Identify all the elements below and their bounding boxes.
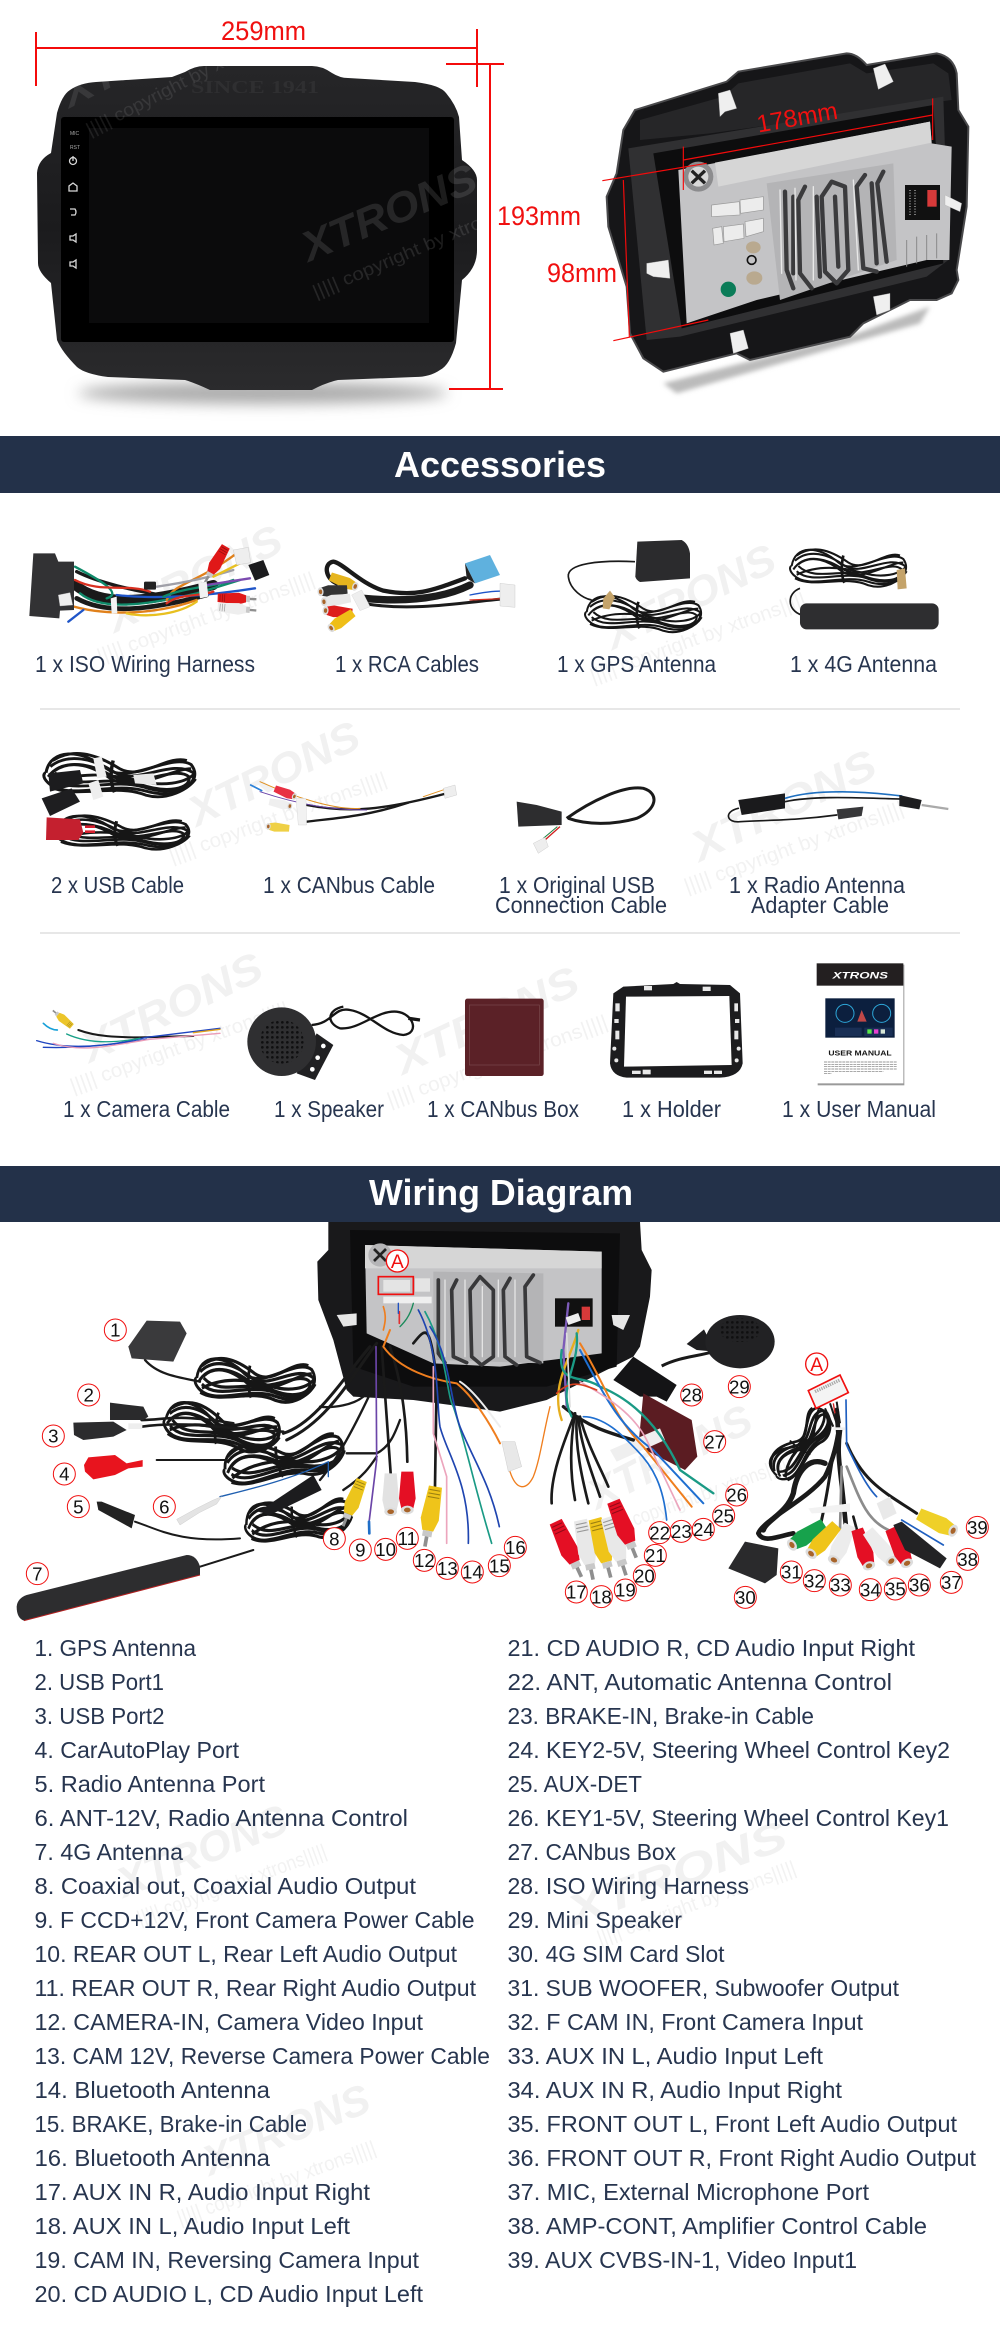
heading: Accessories: Accessories xyxy=(394,444,606,485)
accessories watermarks: XTRONS xyxy=(178,712,367,836)
accessories row 3 captions: 1 x Holder xyxy=(622,1096,721,1122)
callouts 16 to 39: 30 xyxy=(735,1587,756,1608)
wiring diagram xyxy=(17,1222,988,1621)
accessories watermarks xyxy=(67,516,907,1112)
connector A cable assembly xyxy=(758,1400,943,1545)
port list left column: 2. USB Port1 xyxy=(34,1669,164,1695)
port list left column: 10. REAR OUT L, Rear Left Audio Output xyxy=(34,1941,458,1967)
camera cable xyxy=(37,1007,220,1048)
accessories watermarks: XTRONS xyxy=(71,943,270,1072)
embossed brand text: SINCE 1941 xyxy=(191,77,319,97)
user manual: USER MANUAL xyxy=(828,1048,892,1057)
port list left column: 20. CD AUDIO L, CD Audio Input Left xyxy=(34,2281,424,2307)
callouts 16 to 39: 20 xyxy=(634,1565,655,1586)
callouts 16 to 39: 24 xyxy=(693,1519,714,1540)
callouts 1 to 15: 8 xyxy=(329,1528,340,1549)
head unit rear xyxy=(317,1222,652,1412)
port list left column: 6. ANT-12V, Radio Antenna Control xyxy=(34,1805,408,1831)
rear shadow xyxy=(663,307,930,393)
upper plastic recess xyxy=(640,63,952,140)
port list left column: 13. CAM 12V, Reverse Camera Power Cable xyxy=(34,2043,490,2069)
label 178mm: 178mm xyxy=(755,98,840,139)
RCA plugs 17 to 21 xyxy=(547,1498,645,1582)
accessories row 2 captions: 2 x USB Cable xyxy=(51,872,184,898)
touch key icons xyxy=(69,131,80,268)
RCA plugs 8 to 12 xyxy=(336,1472,445,1548)
accessories row 1 captions: 1 x ISO Wiring Harness xyxy=(35,651,255,677)
callouts 1 to 15: 1 xyxy=(110,1320,121,1341)
port list left column: 11. REAR OUT R, Rear Right Audio Output xyxy=(34,1975,477,2001)
sockets 31 to 39 xyxy=(784,1497,961,1572)
white mounting clips xyxy=(647,64,962,353)
touch key icons: MIC xyxy=(70,131,80,137)
white label tag xyxy=(610,1428,665,1462)
watermark on screen: ||||| copyright by xtrons||||| xyxy=(309,194,529,302)
port list left column: 4. CarAutoPlay Port xyxy=(34,1737,240,1763)
head unit bezel xyxy=(37,66,477,390)
port list left column: 15. BRAKE, Brake-in Cable xyxy=(34,2111,307,2137)
RCA cables xyxy=(317,555,515,635)
callouts 16 to 39: 18 xyxy=(591,1586,612,1607)
accessories row 1 captions xyxy=(35,651,937,677)
callout A on head unit: A xyxy=(391,1252,404,1273)
front panel shadow xyxy=(78,382,448,404)
callouts 16 to 39: 32 xyxy=(804,1570,825,1591)
wiring left half xyxy=(17,1222,652,1621)
4G antenna xyxy=(790,549,939,629)
accessories watermarks: ||||| copyright by xtrons||||| xyxy=(587,589,809,688)
CANbus box xyxy=(465,999,544,1076)
callouts 1 to 15: 15 xyxy=(489,1555,510,1576)
callouts 1 to 15: 13 xyxy=(437,1558,458,1579)
accessories row 2 photos xyxy=(42,753,948,853)
connector A plug xyxy=(808,1375,848,1430)
port list left column: 14. Bluetooth Antenna xyxy=(34,2077,270,2103)
port list left column: 17. AUX IN R, Audio Input Right xyxy=(34,2179,371,2205)
accessories row 3 captions: 1 x Speaker xyxy=(274,1096,384,1122)
callouts 1 to 15: 10 xyxy=(375,1539,396,1560)
callouts 16 to 39: 17 xyxy=(566,1582,587,1603)
USB cables xyxy=(42,753,195,849)
wiring diagram watermarks: ||||| copyright by xtrons||||| xyxy=(174,2137,379,2230)
callouts 1 to 15: 7 xyxy=(32,1563,43,1584)
callouts 16 to 39: 35 xyxy=(885,1579,906,1600)
callout A on head unit xyxy=(386,1250,408,1273)
mounting frame xyxy=(628,97,948,340)
wiring diagram watermarks: ||||| copyright by xtrons||||| xyxy=(604,1454,790,1540)
callouts 16 to 39: 16 xyxy=(505,1537,526,1558)
lower chassis vents xyxy=(907,233,937,267)
5 radio antenna port xyxy=(97,1502,135,1528)
CANbus cable xyxy=(251,782,457,833)
port list left column xyxy=(34,1635,490,2307)
holder frame xyxy=(610,982,743,1078)
callouts 1 to 15: 4 xyxy=(59,1464,70,1485)
label 259mm: 259mm xyxy=(221,16,306,46)
4G SIM card slot xyxy=(728,1542,778,1583)
watermark on screen: XTRONS xyxy=(292,154,484,271)
silver chassis xyxy=(678,122,952,323)
port list right column: 32. F CAM IN, Front Camera Input xyxy=(508,2009,864,2035)
width and height dimension lines xyxy=(36,29,504,389)
callouts 1 to 15: 3 xyxy=(48,1426,59,1447)
wiring diagram watermarks: ||||| copyright by xtrons||||| xyxy=(594,1857,799,1950)
wiring diagram watermarks: ||||| copyright by xtrons||||| xyxy=(134,1841,330,1930)
port list left column: 8. Coaxial out, Coaxial Audio Output xyxy=(34,1873,417,1899)
callouts 16 to 39: 39 xyxy=(967,1517,988,1538)
port list right column: 34. AUX IN R, Audio Input Right xyxy=(508,2077,843,2103)
callouts 1 to 15: 14 xyxy=(462,1562,483,1583)
port list left column: 1. GPS Antenna xyxy=(34,1635,196,1661)
port list right column: 25. AUX-DET xyxy=(508,1771,642,1797)
port list left column: 16. Bluetooth Antenna xyxy=(34,2145,270,2171)
accessories row 2 captions: 1 x Radio Antenna xyxy=(729,872,905,898)
heading: Wiring Diagram xyxy=(0,1166,1000,1222)
callouts 16 to 39: 19 xyxy=(615,1580,636,1601)
callout A on cable: A xyxy=(810,1355,823,1376)
callouts 16 to 39: 25 xyxy=(713,1505,734,1526)
callout A on cable xyxy=(806,1353,828,1376)
accessories row 2 captions: Connection Cable xyxy=(495,892,667,918)
accessories row 3 captions: 1 x Camera Cable xyxy=(63,1096,230,1122)
device front view with dimensions xyxy=(37,0,529,404)
accessories row 2 captions xyxy=(51,872,905,918)
ISO wiring block xyxy=(613,1357,677,1402)
port list right column: 27. CANbus Box xyxy=(508,1839,676,1865)
heading: Wiring Diagram: Wiring Diagram xyxy=(369,1172,633,1213)
callouts 1 to 15: 11 xyxy=(398,1528,417,1549)
port list left column: 12. CAMERA-IN, Camera Video Input xyxy=(34,2009,424,2035)
X badge xyxy=(683,162,713,192)
connector tie xyxy=(566,1313,581,1325)
port list right column: 22. ANT, Automatic Antenna Control xyxy=(508,1669,892,1695)
mini speaker xyxy=(662,1315,775,1368)
callouts 16 to 39: 21 xyxy=(645,1545,666,1566)
port list left column: 19. CAM IN, Reversing Camera Input xyxy=(34,2247,420,2273)
chassis pocket xyxy=(653,105,943,328)
accessories row 3 captions: 1 x CANbus Box xyxy=(427,1096,579,1122)
port list right column: 21. CD AUDIO R, CD Audio Input Right xyxy=(508,1635,916,1661)
accessories row 1 captions: 1 x 4G Antenna xyxy=(790,651,937,677)
port list left column: 9. F CCD+12V, Front Camera Power Cable xyxy=(34,1907,474,1933)
6 ANT-12V terminal xyxy=(177,1497,222,1525)
speaker xyxy=(247,1007,420,1080)
connector socket A highlight xyxy=(378,1277,432,1303)
accessories row 3 photos xyxy=(37,999,544,1080)
accessories watermarks: XTRONS xyxy=(96,516,290,642)
callouts 16 to 39 xyxy=(504,1376,988,1608)
label 98mm: 98mm xyxy=(547,258,617,288)
accessories watermarks: ||||| copyright by xtrons||||| xyxy=(384,1011,611,1112)
rear housing xyxy=(607,53,968,372)
accessories row 1 photos xyxy=(29,540,939,635)
wiring diagram watermarks xyxy=(108,1395,799,2230)
1 GPS antenna puck xyxy=(128,1321,187,1362)
device rear view xyxy=(602,53,968,393)
accessories watermarks: ||||| copyright by xtrons||||| xyxy=(67,998,292,1098)
wiring diagram watermarks: XTRONS xyxy=(108,1795,294,1907)
heading: Accessories xyxy=(0,436,1000,493)
callouts 16 to 39: 22 xyxy=(649,1522,670,1543)
green port xyxy=(721,282,736,297)
port list right column: 37. MIC, External Microphone Port xyxy=(508,2179,870,2205)
heatsink xyxy=(767,163,897,300)
port list right column: 38. AMP-CONT, Amplifier Control Cable xyxy=(508,2213,927,2239)
accessories row 3 captions: 1 x User Manual xyxy=(782,1096,936,1122)
radio antenna adapter cable xyxy=(728,792,948,822)
accessories watermarks: ||||| copyright by xtrons||||| xyxy=(681,798,907,898)
loose white connector xyxy=(502,1442,522,1472)
7 4G antenna bar xyxy=(17,1555,200,1621)
port list left column: 3. USB Port2 xyxy=(34,1703,164,1729)
port list right column xyxy=(508,1635,977,2273)
user manual: XTRONS xyxy=(831,970,888,980)
callouts 1 to 15: 2 xyxy=(83,1385,94,1406)
callouts 16 to 39: 31 xyxy=(781,1562,802,1583)
callouts 16 to 39: 29 xyxy=(729,1376,750,1397)
accessories row 3 captions xyxy=(63,1096,936,1122)
callouts 16 to 39: 36 xyxy=(909,1575,930,1596)
accessories watermarks: XTRONS xyxy=(681,740,884,871)
screen xyxy=(61,117,454,342)
port list left column: 18. AUX IN L, Audio Input Left xyxy=(34,2213,351,2239)
wiring diagram watermarks: XTRONS xyxy=(559,1812,793,1935)
coloured harness wires xyxy=(510,1303,713,1520)
ISO wiring harness xyxy=(29,543,269,622)
callouts 1 to 15: 5 xyxy=(73,1496,84,1517)
callouts 16 to 39: 33 xyxy=(830,1575,851,1596)
port list right column: 26. KEY1-5V, Steering Wheel Control Key1 xyxy=(508,1805,949,1831)
callouts 16 to 39: 34 xyxy=(860,1579,881,1600)
accessories watermarks: ||||| copyright by xtrons||||| xyxy=(94,568,318,668)
accessories watermarks: ||||| copyright by xtrons||||| xyxy=(166,768,390,868)
CANbus box in diagram xyxy=(638,1393,697,1470)
wiring diagram watermarks: XTRONS xyxy=(194,2075,377,2185)
watermark on screen xyxy=(287,140,529,302)
right USB connector xyxy=(905,185,940,220)
callouts 16 to 39: 23 xyxy=(671,1521,692,1542)
original USB connection cable xyxy=(517,788,654,853)
callouts 16 to 39: 26 xyxy=(726,1485,747,1506)
callouts 16 to 39: 38 xyxy=(957,1549,978,1570)
port list right column: 33. AUX IN L, Audio Input Left xyxy=(508,2043,824,2069)
port list left column: 5. Radio Antenna Port xyxy=(34,1771,266,1797)
antenna sockets xyxy=(746,241,762,285)
port list right column: 24. KEY2-5V, Steering Wheel Control Key2 xyxy=(508,1737,950,1763)
user manual xyxy=(817,963,904,1085)
antenna filter box xyxy=(258,1475,322,1515)
port list right column: 28. ISO Wiring Harness xyxy=(508,1873,749,1899)
port list right column: 23. BRAKE-IN, Brake-in Cable xyxy=(508,1703,814,1729)
callouts 1 to 15: 12 xyxy=(414,1550,435,1571)
wiring right half xyxy=(502,1303,988,1608)
3 USB port connector xyxy=(73,1422,142,1440)
callouts 1 to 15: 6 xyxy=(159,1496,170,1517)
callouts 16 to 39: 28 xyxy=(681,1385,702,1406)
touch key icons: RST xyxy=(70,145,80,151)
red dimension lines xyxy=(602,98,933,341)
port list right column: 36. FRONT OUT R, Front Right Audio Output xyxy=(508,2145,977,2171)
watermark on bezel: ||||| copyright by xtrons||||| xyxy=(83,22,288,140)
4 CarAutoPlay red connector xyxy=(84,1455,143,1479)
accessories watermarks: XTRONS xyxy=(594,535,783,659)
display area xyxy=(89,128,429,323)
accessories row 1 captions: 1 x GPS Antenna xyxy=(557,651,716,677)
GPS antenna xyxy=(568,540,702,632)
callouts 16 to 39: 37 xyxy=(941,1572,962,1593)
callouts 16 to 39: 27 xyxy=(704,1431,725,1452)
2 USB port connector xyxy=(110,1403,148,1420)
callouts 1 to 15: 9 xyxy=(355,1540,366,1561)
port list right column: 35. FRONT OUT L, Front Left Audio Output xyxy=(508,2111,958,2137)
label 193mm: 193mm xyxy=(497,201,581,231)
port list right column: 39. AUX CVBS-IN-1, Video Input1 xyxy=(508,2247,857,2273)
port list right column: 30. 4G SIM Card Slot xyxy=(508,1941,725,1967)
connector sockets xyxy=(712,197,763,245)
accessories row 2 captions: 1 x Original USB xyxy=(499,872,655,898)
port list right column: 31. SUB WOOFER, Subwoofer Output xyxy=(508,1975,900,2001)
watermark on bezel xyxy=(51,0,288,143)
cables and coils xyxy=(135,1303,500,1567)
accessories row 1 captions: 1 x RCA Cables xyxy=(335,651,479,677)
port list right column: 29. Mini Speaker xyxy=(508,1907,682,1933)
accessories row 2 captions: 1 x CANbus Cable xyxy=(263,872,435,898)
wiring diagram watermarks: XTRONS xyxy=(578,1395,760,1519)
port list left column: 7. 4G Antenna xyxy=(34,1839,183,1865)
accessories watermarks: XTRONS xyxy=(385,957,586,1084)
callouts 1 to 15 xyxy=(26,1319,510,1585)
chassis top strip xyxy=(715,122,932,187)
accessories row 2 captions: Adapter Cable xyxy=(751,892,889,918)
